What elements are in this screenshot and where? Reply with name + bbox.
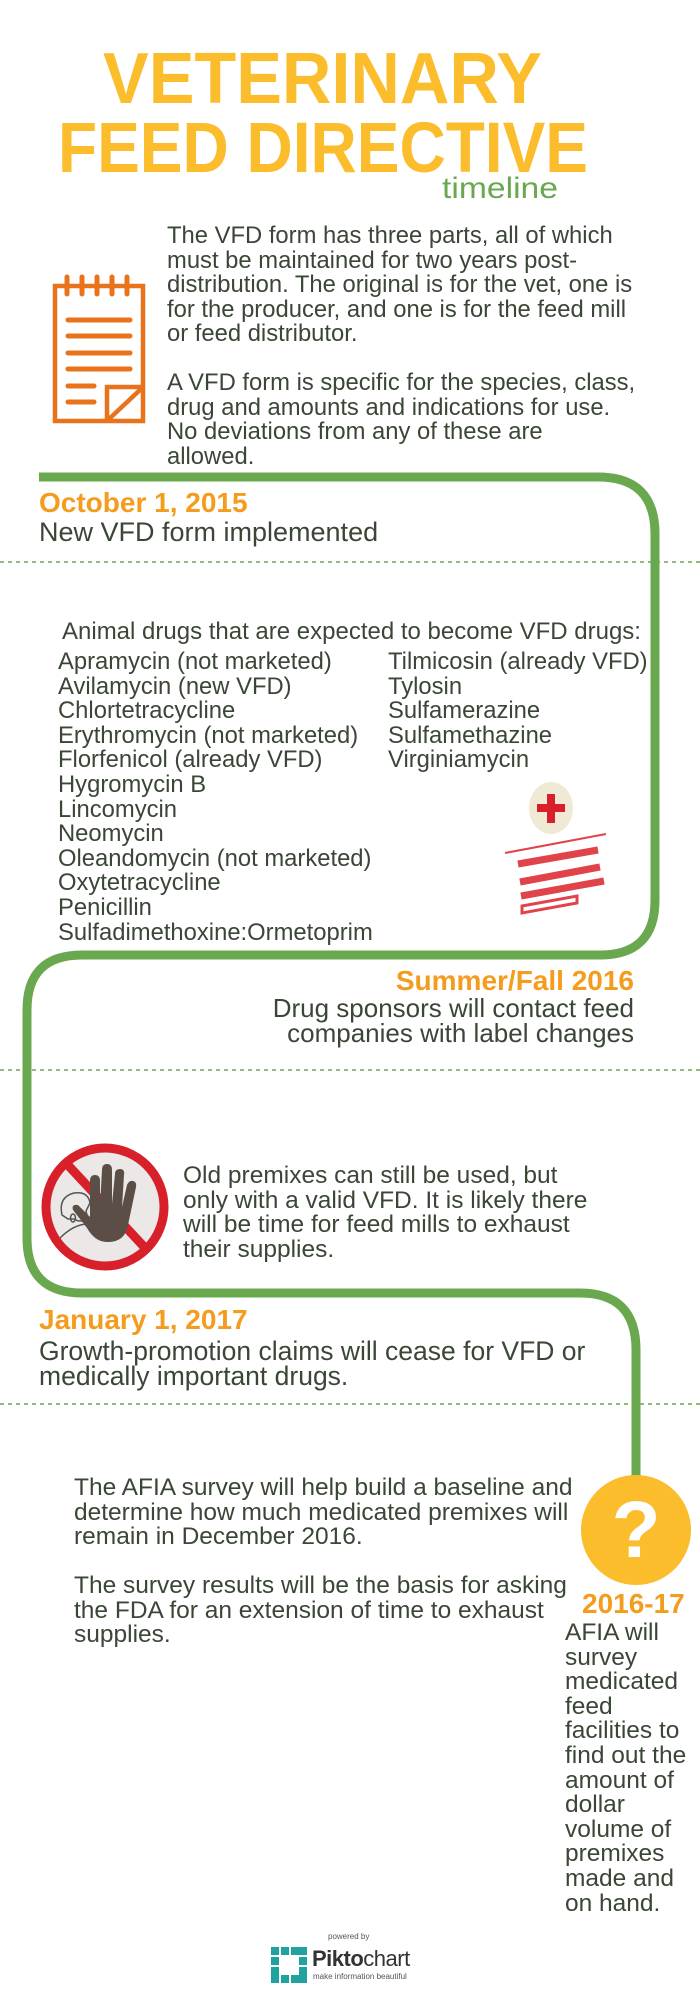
date: 2016-17: 2016-17: [582, 1588, 685, 1619]
text block: survey results: supplies.: [74, 1621, 171, 1648]
text: growth promotion: [39, 1336, 585, 1390]
date: Summer/Fall 2016: Summer/Fall 2016: [396, 965, 634, 996]
text block: VFD form parts: The VFD form has three parts, all of which: [167, 222, 613, 249]
list: drugs column 1: Lincomycin: [58, 796, 177, 823]
text block: VFD form parts: must be maintained for two years post-: [167, 246, 577, 274]
text: AFIA will survey: medicated: [565, 1668, 678, 1695]
text: AFIA will survey: dollar: [565, 1791, 625, 1818]
text: AFIA will survey: made and: [565, 1865, 674, 1892]
text: old premixes: will be time for feed mills to exhaust: [183, 1211, 570, 1238]
heading: animal drugs: Animal drugs that are expected to become VFD drugs:: [62, 618, 641, 645]
list: drugs column 1: Florfenicol (already VFD): [58, 746, 322, 773]
list: drugs column 2: Tilmicosin (already VFD): [388, 648, 648, 675]
list: drugs column 2: [388, 648, 648, 773]
text: AFIA will survey: AFIA will: [565, 1619, 659, 1646]
text block: VFD form specific: No deviations from any of these are: [167, 418, 543, 445]
list: drugs column 1: Hygromycin B: [58, 771, 206, 798]
list: drugs column 2: Sulfamerazine: [388, 697, 540, 724]
icon: question mark circle: [581, 1475, 691, 1585]
list: drugs column 1: Erythromycin (not marketed): [58, 722, 358, 749]
list: drugs column 1: Penicillin: [58, 894, 152, 921]
text block: AFIA survey baseline: The AFIA survey will help build a baseline and: [74, 1474, 572, 1501]
text block: VFD form parts: [167, 222, 632, 347]
text: AFIA will survey: facilities to: [565, 1717, 679, 1744]
icon: question mark circle: ?: [612, 1485, 660, 1574]
list: drugs column 2: Tylosin: [388, 673, 462, 700]
text: growth promotion: Growth-promotion claims will cease for VFD or: [39, 1336, 585, 1366]
text block: VFD form specific: allowed.: [167, 442, 254, 470]
footer: piktochart logo: [271, 1932, 410, 1983]
text block: VFD form specific: drug and amounts and indications for use.: [167, 394, 610, 420]
text block: survey results: [74, 1572, 567, 1648]
text: AFIA will survey: feed: [565, 1693, 613, 1720]
text block: survey results: the FDA for an extension of time to exhaust: [74, 1596, 544, 1624]
text: AFIA will survey: [565, 1619, 686, 1917]
text block: VFD form specific: A VFD form is specific for the species, class,: [167, 369, 635, 396]
text block: VFD form parts: or feed distributor.: [167, 320, 357, 347]
title: [58, 39, 588, 205]
text: AFIA will survey: on hand.: [565, 1890, 660, 1917]
list: drugs column 2: Virginiamycin: [388, 746, 529, 773]
list: drugs column 1: Oleandomycin (not marketed): [58, 845, 371, 872]
text block: AFIA survey baseline: remain in December 2016.: [74, 1523, 363, 1550]
icon: notepad: [52, 274, 146, 424]
footer: piktochart logo: make information beautiful: [313, 1972, 407, 1981]
text: AFIA will survey: premixes: [565, 1840, 664, 1867]
text block: survey results: The survey results will be the basis for asking: [74, 1572, 567, 1599]
list: drugs column 1: Sulfadimethoxine:Ormetoprim: [58, 919, 373, 946]
text block: VFD form parts: for the producer, and one is for the feed mill: [167, 296, 626, 322]
text: AFIA will survey: survey: [565, 1644, 637, 1671]
text: drug sponsors: companies with label changes: [287, 1018, 634, 1048]
text: growth promotion: medically important drugs.: [39, 1360, 348, 1390]
date: January 1, 2017: January 1, 2017: [39, 1304, 248, 1335]
text: old premixes: their supplies.: [183, 1236, 334, 1263]
list: drugs column 1: Chlortetracycline: [58, 697, 235, 724]
icon: stop hand: [42, 1144, 168, 1270]
text: old premixes: Old premixes can still be used, but: [183, 1162, 558, 1189]
footer: piktochart logo: powered by: [328, 1932, 369, 1941]
text: drug sponsors: [273, 993, 634, 1048]
text: drug sponsors: Drug sponsors will contact feed: [273, 993, 634, 1023]
text block: VFD form parts: distribution. The original is for the vet, one is: [167, 271, 632, 298]
text: old premixes: only with a valid VFD. It is likely there: [183, 1187, 587, 1214]
list: drugs column 1: Neomycin: [58, 820, 164, 847]
list: drugs column 1: Oxytetracycline: [58, 869, 221, 896]
title: VETERINARY: [103, 39, 542, 119]
list: drugs column 2: Sulfamethazine: [388, 722, 552, 749]
text: AFIA will survey: volume of: [565, 1816, 671, 1843]
date: October 1, 2015: October 1, 2015: [39, 487, 248, 518]
list: drugs column 1: Apramycin (not marketed): [58, 648, 332, 675]
title: FEED DIRECTIVE: [58, 109, 588, 188]
icon: medical prescription: [504, 782, 606, 915]
text block: VFD form specific: [167, 369, 635, 470]
text: AFIA will survey: find out the: [565, 1742, 686, 1769]
list: drugs column 1: [58, 648, 373, 946]
title: timeline: [442, 172, 558, 205]
text: AFIA will survey: amount of: [565, 1767, 674, 1794]
footer: piktochart logo: Piktochart: [312, 1946, 410, 1971]
text: new VFD form: New VFD form implemented: [39, 517, 378, 547]
text block: AFIA survey baseline: [74, 1474, 572, 1550]
text block: AFIA survey baseline: determine how much medicated premixes will: [74, 1498, 568, 1526]
text: old premixes: [183, 1162, 587, 1263]
list: drugs column 1: Avilamycin (new VFD): [58, 673, 292, 700]
